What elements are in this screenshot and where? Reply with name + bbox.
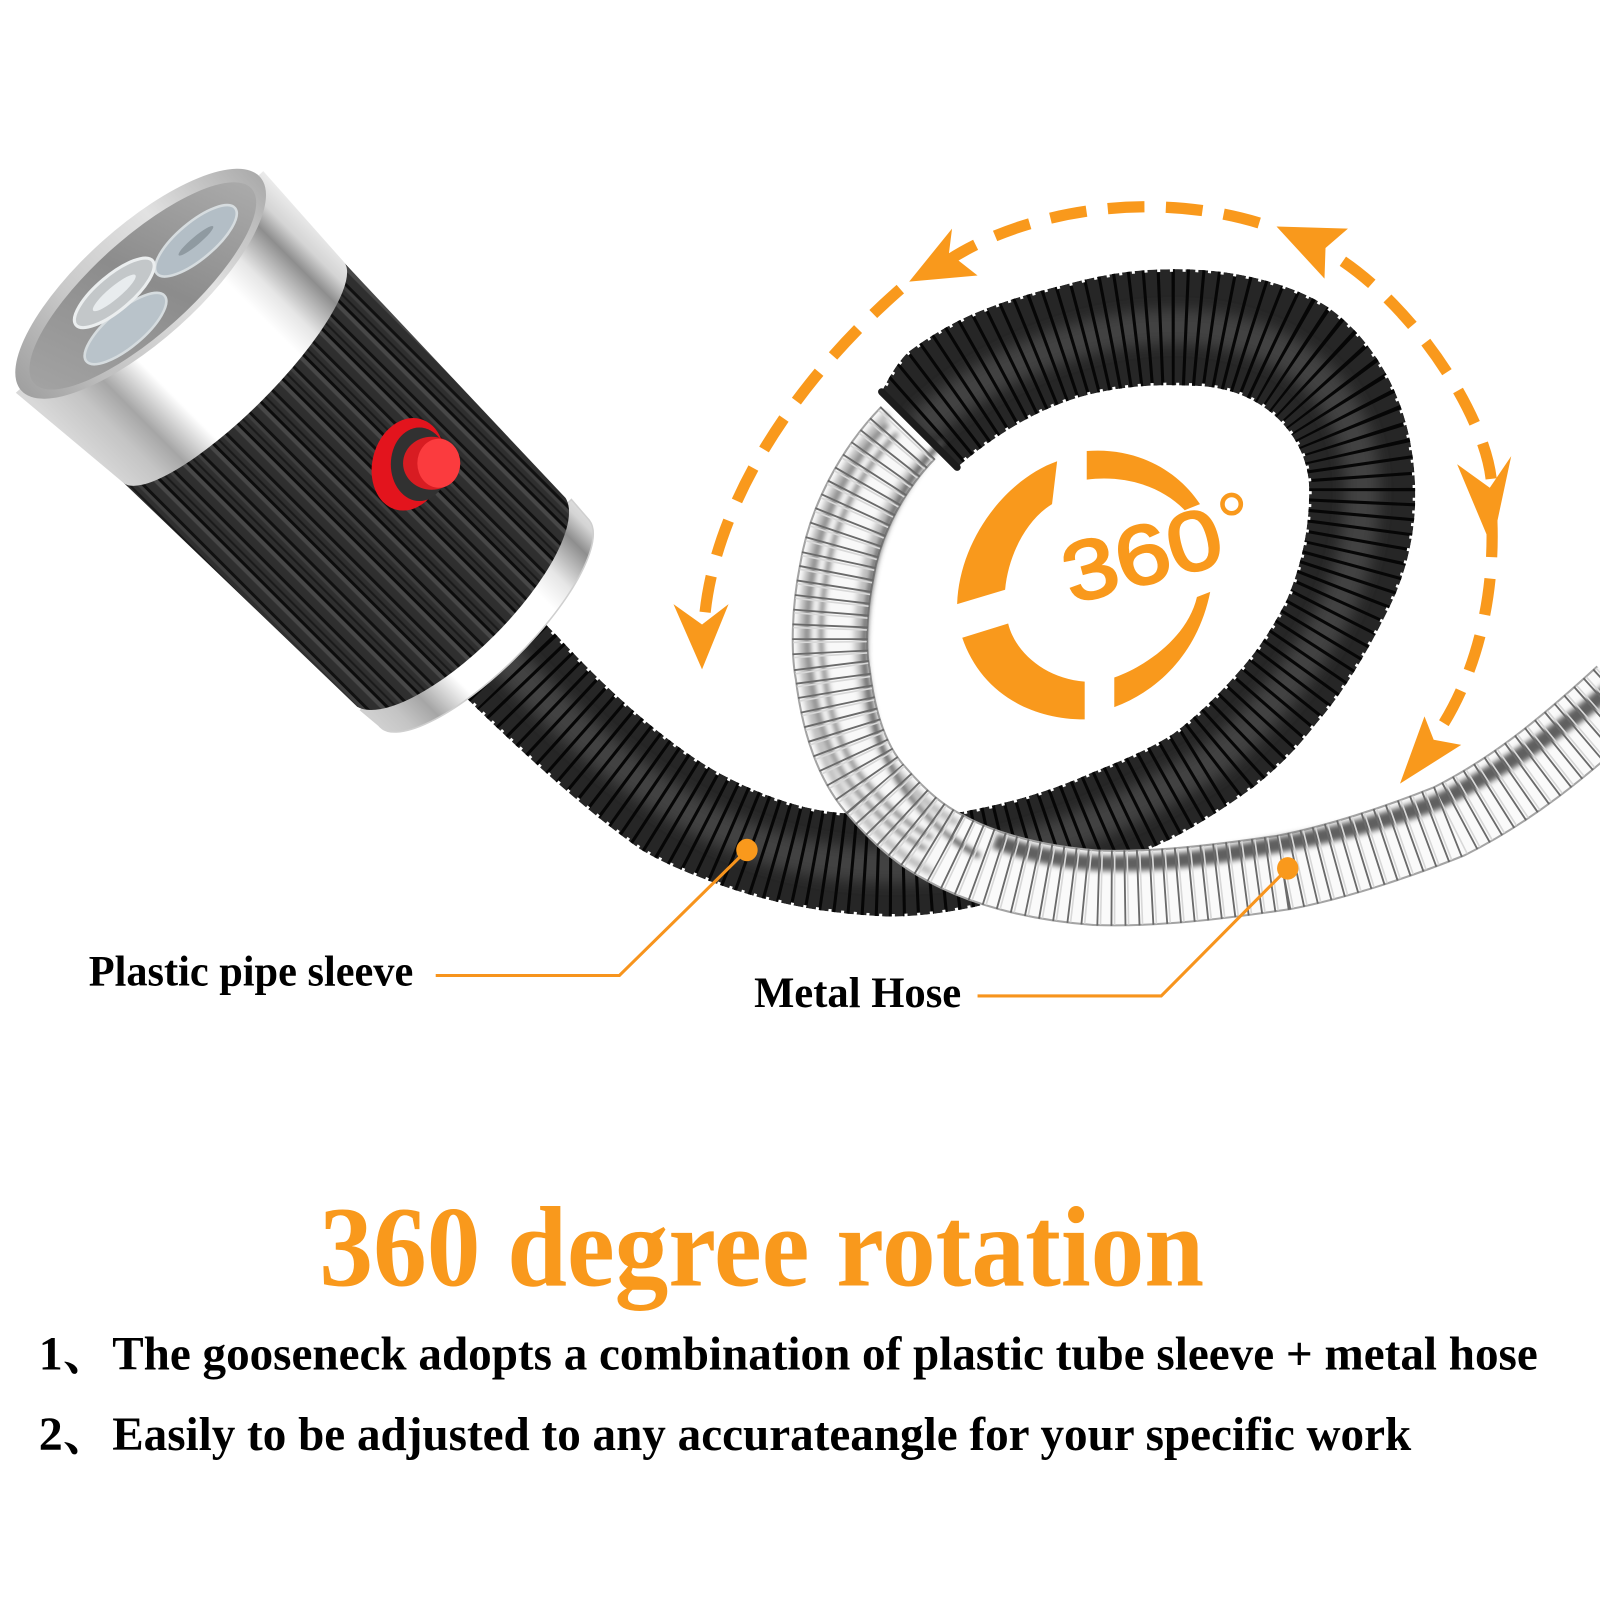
360 degree emblem: 360 bbox=[1052, 489, 1232, 621]
ribbed black body bbox=[114, 253, 606, 745]
dashed rotation arrows bbox=[673, 207, 1511, 784]
front chrome sleeve bbox=[16, 158, 377, 520]
360 degree emblem bbox=[957, 451, 1241, 719]
plastic pipe sleeve hose bbox=[447, 269, 1415, 917]
list item 2: Easily to be adjusted to any accurateangle for your specific work bbox=[112, 1408, 1412, 1461]
callout: metal hose bbox=[754, 857, 1298, 1017]
metal hose bbox=[815, 429, 1600, 888]
callout: metal hose: Metal Hose bbox=[754, 970, 961, 1017]
LED lenses bbox=[65, 194, 247, 375]
list item 1: The gooseneck adopts a combination of plastic tube sleeve + metal hose bbox=[112, 1327, 1538, 1380]
plastic hose end cap bbox=[882, 392, 957, 467]
callout: plastic pipe sleeve bbox=[89, 839, 758, 996]
list item 2: 2、 bbox=[39, 1408, 111, 1461]
front rim bbox=[0, 134, 298, 433]
dark reflection band on lower section bbox=[995, 679, 1600, 864]
lamp head bbox=[0, 119, 633, 775]
lamp face bbox=[2, 153, 284, 419]
list item 1: 1、 bbox=[39, 1327, 111, 1380]
red push button bbox=[362, 410, 460, 519]
callout: plastic pipe sleeve: Plastic pipe sleeve bbox=[89, 949, 413, 996]
title: 360 degree rotation bbox=[319, 1184, 1204, 1311]
rear chrome collar bbox=[361, 499, 623, 761]
chrome shading on curved section bbox=[815, 429, 980, 856]
